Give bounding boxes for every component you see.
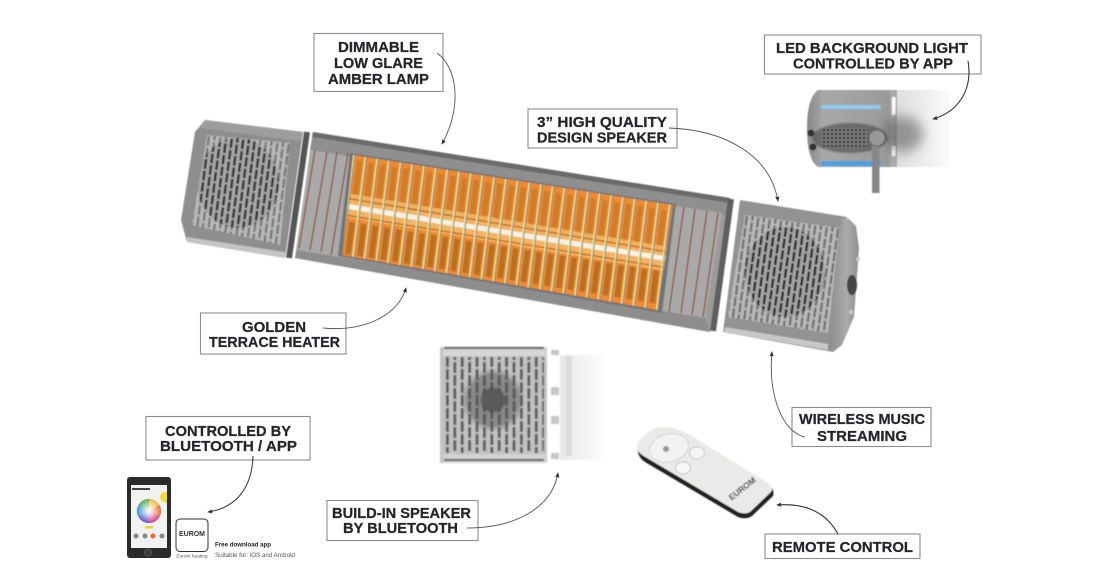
app icon bbox=[176, 519, 208, 560]
colour wheel bbox=[137, 499, 161, 523]
label: dimmable lamp: AMBER LAMP bbox=[328, 71, 429, 88]
arrow: controlled by bluetooth bbox=[208, 456, 253, 512]
arrow: remote control bbox=[777, 505, 838, 534]
label: controlled by bluetooth bbox=[146, 416, 310, 460]
brand mark: EUROM bbox=[727, 475, 758, 502]
end cap with knob bbox=[828, 218, 860, 352]
label: golden terrace heater: TERRACE HEATER bbox=[209, 334, 340, 351]
heater bbox=[181, 120, 860, 352]
label: wireless music streaming: STREAMING bbox=[817, 428, 907, 445]
download text: Suitable for: iOS and Android bbox=[215, 553, 295, 559]
download text: Free download app bbox=[215, 542, 271, 548]
label: remote control bbox=[765, 534, 920, 558]
right speaker section bbox=[723, 200, 860, 352]
arrow: golden terrace heater bbox=[323, 288, 406, 329]
label: design speaker: DESIGN SPEAKER bbox=[537, 130, 667, 146]
label: LED background light bbox=[764, 35, 981, 74]
label: build-in speaker: BUILD-IN SPEAKER bbox=[332, 505, 471, 522]
arrow: LED light bbox=[933, 61, 969, 119]
centre heating section bbox=[289, 132, 731, 332]
arrow: design speaker bbox=[669, 128, 778, 201]
speaker module image bbox=[440, 347, 604, 463]
label: LED background light: LED BACKGROUND LIGHT bbox=[776, 40, 968, 57]
label: remote control: REMOTE CONTROL bbox=[772, 539, 913, 556]
label: controlled by bluetooth: BLUETOOTH / APP bbox=[160, 438, 297, 455]
label: design speaker: 3” HIGH QUALITY bbox=[537, 114, 667, 131]
LED lights detail image bbox=[807, 90, 950, 193]
download text bbox=[215, 542, 295, 559]
label: golden terrace heater: GOLDEN bbox=[242, 319, 306, 336]
side vent slits bbox=[299, 150, 718, 317]
label: dimmable lamp: LOW GLARE bbox=[334, 55, 423, 72]
phone with app bbox=[127, 477, 171, 558]
left speaker section bbox=[181, 120, 303, 258]
label: wireless music streaming bbox=[792, 408, 931, 446]
arrow: dimmable lamp bbox=[437, 53, 455, 144]
label: controlled by bluetooth: CONTROLLED BY bbox=[165, 423, 291, 440]
label: build-in speaker bbox=[327, 500, 478, 540]
app icon: EUROM bbox=[179, 531, 205, 538]
label: build-in speaker: BY BLUETOOTH bbox=[343, 520, 458, 537]
label: design speaker bbox=[528, 109, 677, 148]
label: dimmable lamp bbox=[314, 34, 443, 92]
label: wireless music streaming: WIRELESS MUSIC bbox=[799, 411, 925, 428]
label: dimmable lamp: DIMMABLE bbox=[338, 39, 419, 56]
app icon: Eurom heating bbox=[176, 554, 208, 560]
label: golden terrace heater bbox=[200, 313, 346, 354]
heat slats and lamp bbox=[342, 155, 673, 310]
remote control image bbox=[637, 427, 773, 518]
arrow: build-in speaker bbox=[467, 473, 558, 528]
label: LED background light: CONTROLLED BY APP bbox=[793, 56, 953, 72]
arrow: wireless streaming bbox=[771, 352, 805, 437]
